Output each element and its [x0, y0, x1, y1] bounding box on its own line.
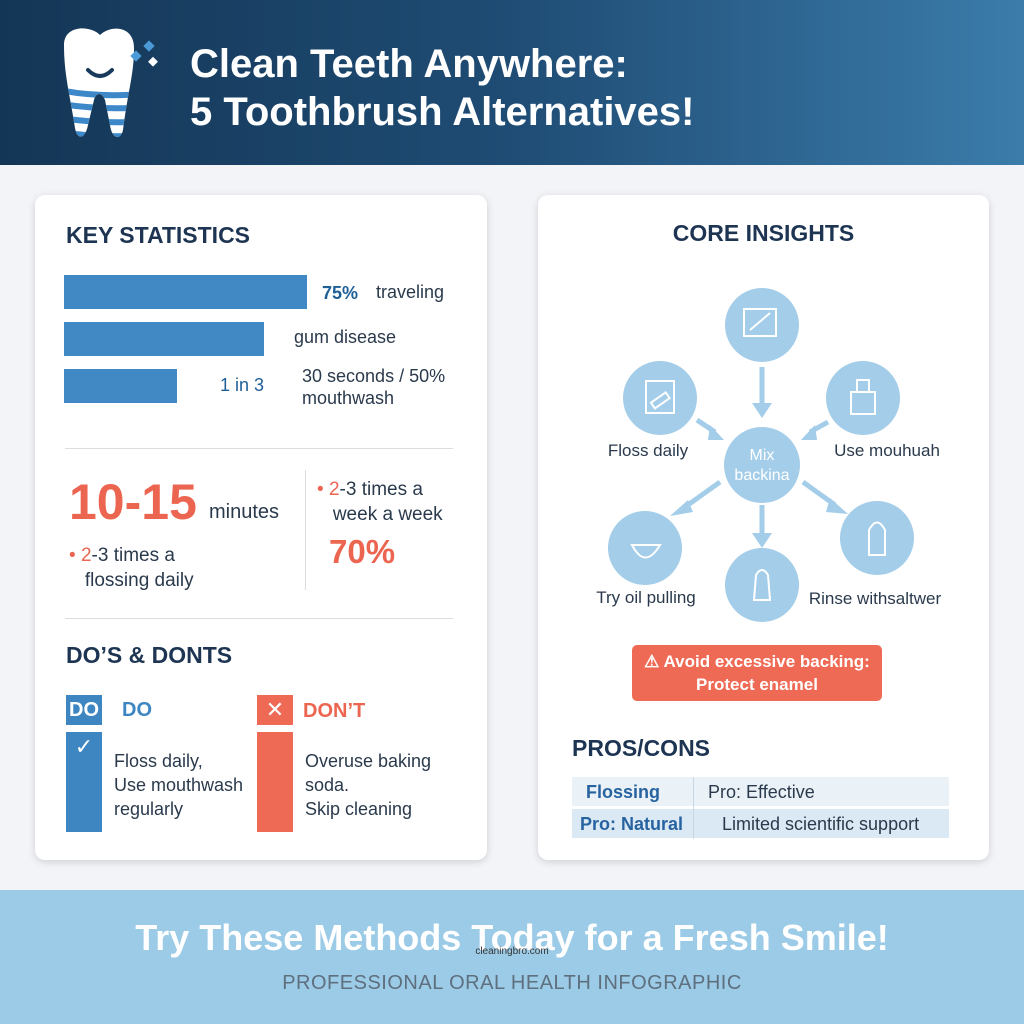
title: 5 Toothbrush Alternatives! [190, 90, 694, 134]
don't column: DON’T [303, 700, 365, 722]
stat block: 70%: week a week [333, 504, 443, 525]
do column: ✓ [75, 734, 93, 759]
header [0, 0, 1024, 165]
footer subtitle: PROFESSIONAL ORAL HEALTH INFOGRAPHIC [282, 972, 742, 994]
stat block: 70%: 70% [329, 533, 395, 570]
bar chart: 75% [322, 283, 358, 303]
bar chart: traveling [376, 282, 444, 302]
diagram: Try oil pulling [596, 588, 696, 607]
footer: cleaningbro.com [475, 946, 549, 957]
do column: regularly [114, 799, 183, 819]
table: pros/cons [572, 777, 949, 839]
don't column: soda. [305, 775, 349, 795]
heading: key statistics: KEY STATISTICS [66, 222, 250, 248]
bar chart: 30 seconds / 50% [302, 366, 445, 386]
callout: warning: Protect enamel [696, 675, 818, 694]
stat block: minutes: 10-15 [69, 474, 197, 530]
title [190, 42, 694, 134]
diagram: Floss daily [608, 441, 689, 460]
do column [66, 695, 243, 832]
stat block: minutes: flossing daily [85, 570, 194, 591]
do column: Floss daily, [114, 751, 203, 771]
table: pros/cons: Flossing [586, 782, 660, 802]
table: pros/cons: Limited scientific support [722, 814, 919, 834]
panel: core insights [538, 195, 989, 860]
table: pros/cons: Pro: Natural [580, 814, 683, 834]
do column: DO [69, 699, 99, 721]
footer headline: Try These Methods Today for a Fresh Smile! [135, 917, 889, 958]
stat block: 70%: • 2-3 times a [317, 479, 423, 500]
bar chart: 1 in 3 [220, 375, 264, 395]
stat block: 70% [317, 479, 443, 570]
panel: key statistics [35, 195, 487, 860]
bar chart: mouthwash [302, 388, 394, 408]
don't column: Skip cleaning [305, 799, 412, 819]
diagram: Mix [750, 447, 774, 464]
diagram: Use mouhuah [834, 441, 940, 460]
don't column: ✕ [266, 697, 284, 722]
bar chart [64, 275, 445, 408]
footer [0, 890, 1024, 1024]
bar chart: gum disease [294, 327, 396, 347]
title: Clean Teeth Anywhere: [190, 42, 628, 86]
diagram: Rinse withsaltwer [809, 589, 941, 608]
stat block: minutes [69, 474, 279, 591]
do column: DO [122, 699, 152, 721]
heading: do's & donts: DO’S & DONTS [66, 642, 232, 668]
don't column: Overuse baking [305, 751, 431, 771]
icon: tooth [64, 28, 158, 137]
diagram: backina [734, 467, 790, 484]
heading: pros/cons: PROS/CONS [572, 735, 710, 761]
heading: core insights: CORE INSIGHTS [673, 220, 854, 246]
do column: Use mouthwash [114, 775, 243, 795]
table: pros/cons: Pro: Effective [708, 782, 815, 802]
stat block: minutes: • 2-3 times a [69, 545, 175, 566]
callout: warning [632, 645, 882, 701]
stat block: minutes: minutes [209, 501, 279, 523]
don't column [257, 695, 431, 832]
callout: warning: ⚠ Avoid excessive backing: [644, 652, 870, 671]
diagram [596, 288, 941, 622]
